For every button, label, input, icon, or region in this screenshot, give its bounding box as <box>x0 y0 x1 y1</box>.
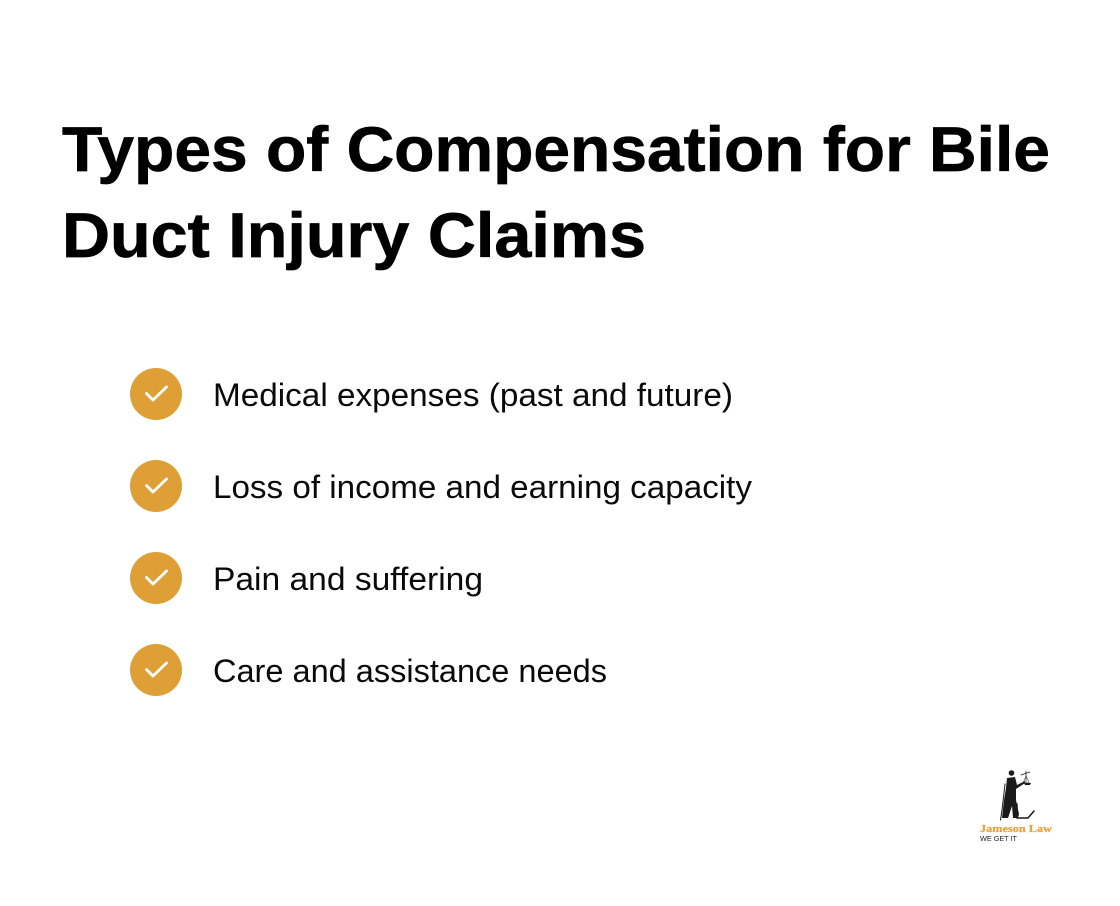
list item: care needs <box>130 644 607 696</box>
list item: pain and suffering <box>130 552 483 604</box>
list item: loss of income: Loss of income and earning capacity <box>213 469 752 505</box>
title: Duct Injury Claims <box>62 201 646 271</box>
logo tagline: WE GET IT <box>980 834 1017 843</box>
checklist <box>130 368 752 696</box>
list item: medical expenses <box>130 368 733 420</box>
logo name: Jameson Law <box>980 823 1052 835</box>
list item: loss of income <box>130 460 752 512</box>
icon: lady justice <box>1000 770 1034 820</box>
title <box>62 115 1050 271</box>
list item: pain and suffering: Pain and suffering <box>213 561 483 597</box>
title: Types of Compensation for Bile <box>62 115 1050 185</box>
logo: Jameson Law <box>980 770 1052 843</box>
list item: medical expenses: Medical expenses (past and future) <box>213 377 733 413</box>
list item: care needs: Care and assistance needs <box>213 653 607 689</box>
